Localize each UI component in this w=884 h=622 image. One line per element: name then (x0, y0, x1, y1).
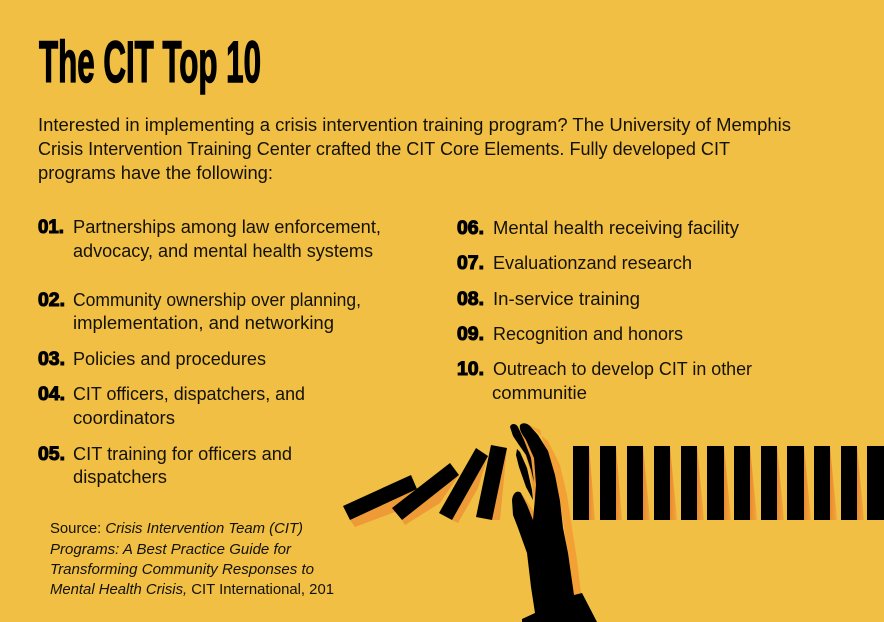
item 10 (457, 359, 752, 403)
bar shadows (589, 446, 864, 520)
list: right column (457, 218, 752, 403)
item 02 (38, 290, 361, 333)
item 04 (38, 384, 305, 428)
intro text (38, 115, 791, 183)
item 06: Mental health receiving facility (493, 218, 739, 238)
intro text: Crisis Intervention Training Center crafted the CIT Core Elements. Fully developed CIT (38, 139, 730, 159)
list: left column (38, 217, 381, 487)
source note: Mental Health Crisis, CIT International, 201 (50, 581, 334, 598)
item 01: Partnerships among law enforcement, (73, 217, 381, 237)
title: The CIT Top 10 (39, 30, 261, 95)
item 01: advocacy, and mental health systems (73, 241, 373, 261)
source note: Transforming Community Responses to (50, 561, 314, 578)
item 03: Policies and procedures (73, 349, 266, 369)
item 10: 10. (457, 359, 484, 380)
item 01 (38, 217, 381, 261)
item 08: In-service training (493, 289, 640, 309)
illustration: standing domino row (573, 446, 884, 520)
finger and thumb shadow slits (519, 428, 537, 524)
middle finger (516, 449, 533, 500)
item 10: communitie (492, 383, 587, 403)
item 07: 07. (457, 253, 484, 274)
item 04: CIT officers, dispatchers, and (73, 384, 305, 404)
item 05: 05. (38, 444, 65, 465)
item 07: Evaluationzand research (493, 253, 692, 273)
item 08: 08. (457, 289, 484, 310)
item 03: 03. (38, 349, 65, 370)
icon: raised hand stopping dominoes (510, 423, 597, 622)
intro text: Interested in implementing a crisis intervention training program? The University of Memphis (38, 115, 791, 135)
item 09: Recognition and honors (493, 324, 683, 344)
source note (50, 520, 334, 598)
intro text: programs have the following: (38, 163, 273, 183)
hand silhouette (512, 423, 597, 622)
item 02: Community ownership over planning, (73, 290, 361, 310)
item 09: 09. (457, 324, 484, 345)
item 04: coordinators (73, 408, 175, 428)
item 04: 04. (38, 384, 65, 405)
item 10: Outreach to develop CIT in other (493, 359, 752, 379)
domino shadows (350, 448, 507, 527)
bars (573, 446, 884, 520)
source note: Programs: A Best Practice Guide for (50, 541, 292, 558)
item 06: 06. (457, 218, 484, 239)
hand shadow (525, 423, 581, 596)
item 02: implementation, and networking (73, 313, 334, 333)
tilted dominoes (343, 445, 507, 520)
item 02: 02. (38, 290, 65, 311)
item 01: 01. (38, 217, 64, 238)
item 05: CIT training for officers and (73, 444, 292, 464)
item 05 (38, 444, 292, 487)
item 05: dispatchers (73, 467, 167, 487)
index finger (510, 424, 534, 482)
illustration: falling dominoes (343, 445, 507, 527)
source note: Source: Crisis Intervention Team (CIT) (50, 520, 303, 537)
